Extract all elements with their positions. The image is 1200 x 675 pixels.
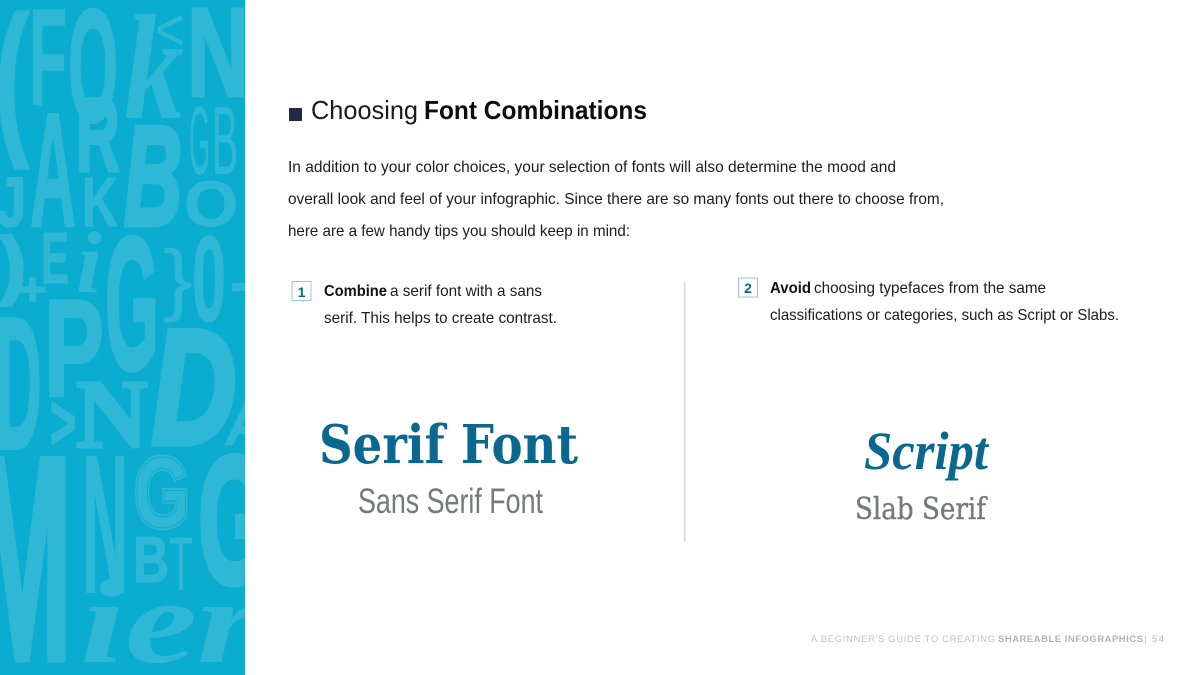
panel: decorative typography sidebar: N <box>82 415 128 634</box>
panel: decorative typography sidebar: P <box>44 272 104 426</box>
tip 1 text: serif. This helps to create contrast. <box>324 310 557 327</box>
panel: decorative typography sidebar: ) <box>0 222 26 306</box>
tip 2 text: Avoid <box>770 280 811 297</box>
panel: decorative typography sidebar: G <box>134 437 190 549</box>
font sample: Script: Script <box>864 421 990 481</box>
panel: decorative typography sidebar: K <box>82 163 118 241</box>
intro paragraph: overall look and feel of your infographic. Since there are so many fonts out there to choose from, <box>288 191 944 208</box>
panel: decorative typography sidebar: > <box>50 378 76 466</box>
tip 2 text: choosing typefaces from the same <box>814 280 1046 297</box>
tip 1 text: Combine <box>324 283 387 300</box>
footer: SHAREABLE INFOGRAPHICS <box>998 634 1143 645</box>
intro paragraph <box>288 159 944 240</box>
tip 2 number badge: 2 <box>744 280 752 296</box>
title <box>289 95 647 125</box>
panel: decorative typography sidebar: E <box>41 219 69 299</box>
panel: decorative typography sidebar: O <box>184 168 238 240</box>
tip 2 number badge <box>738 278 758 297</box>
panel: decorative typography sidebar: A <box>30 78 76 261</box>
panel: decorative typography sidebar: B <box>133 523 169 596</box>
font sample: Sans Serif Font: Sans Serif Font <box>358 482 543 521</box>
panel: decorative typography sidebar: } <box>163 234 193 323</box>
panel: decorative typography sidebar: T <box>169 522 193 607</box>
footer: | 54 <box>1144 634 1164 645</box>
font sample: Serif Font: Serif Font <box>319 414 578 476</box>
panel: decorative typography sidebar: i <box>76 215 103 312</box>
tip 2 text <box>770 280 1119 324</box>
tip 2 text: classifications or categories, such as Script or Slabs. <box>770 307 1119 324</box>
panel: decorative typography sidebar: N <box>76 361 148 469</box>
panel: decorative typography sidebar <box>0 0 245 675</box>
tip 1 number badge <box>292 282 311 300</box>
font sample: Slab Serif: Slab Serif <box>855 492 988 527</box>
panel: decorative typography sidebar: R <box>76 77 120 194</box>
title: Choosing <box>311 95 418 125</box>
panel: decorative typography sidebar: B <box>124 97 182 256</box>
title: Font Combinations <box>424 95 647 125</box>
panel: decorative typography sidebar: D <box>0 278 42 490</box>
panel: decorative typography sidebar: G <box>134 437 190 549</box>
panel: decorative typography sidebar: + <box>18 263 47 315</box>
tip 1 text <box>324 283 557 327</box>
footer <box>811 634 1164 645</box>
tip 1 text: a serif font with a sans <box>390 283 542 300</box>
divider <box>684 281 686 542</box>
tip 1 number badge: 1 <box>298 284 306 300</box>
intro paragraph: here are a few handy tips you should keep in mind: <box>288 223 630 240</box>
intro paragraph: In addition to your color choices, your selection of fonts will also determine the mood and <box>288 159 896 176</box>
footer: A BEGINNER'S GUIDE TO CREATING <box>811 634 995 645</box>
